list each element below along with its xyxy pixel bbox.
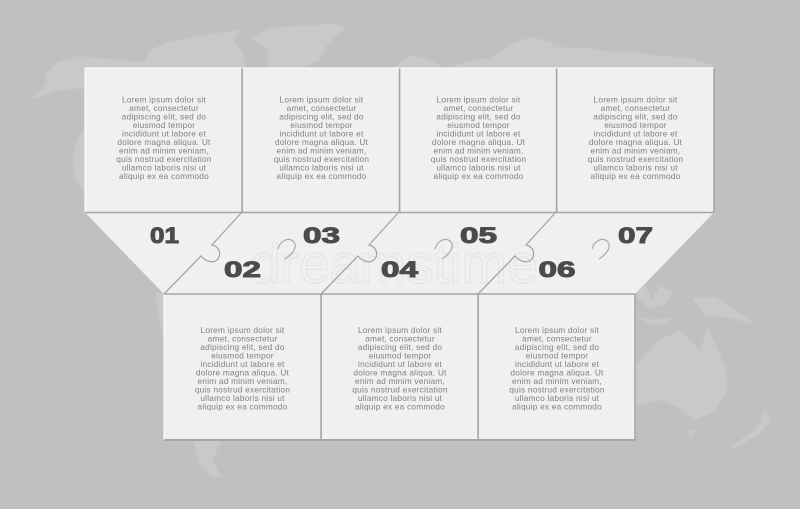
text block: step 06: enim ad minim veniam, bbox=[512, 376, 602, 386]
text block: step 01: adipiscing elit, sed do bbox=[122, 112, 206, 122]
panel: puzzle connector band bbox=[85, 212, 714, 294]
text block: step 01: incididunt ut labore et bbox=[122, 128, 206, 138]
text block: step 03 bbox=[274, 94, 369, 181]
text block: step 04: dolore magna aliqua. Ut bbox=[353, 368, 447, 378]
puzzle divider 03-04 bbox=[321, 212, 399, 294]
panel: step 02 bottom card bbox=[164, 294, 320, 440]
text block: step 01: dolore magna aliqua. Ut bbox=[117, 137, 211, 147]
text block: step 05: ullamco laboris nisi ut bbox=[436, 162, 521, 172]
number 03: 03 bbox=[303, 223, 340, 248]
number 05: 05 bbox=[460, 223, 497, 248]
text block: step 03: enim ad minim veniam, bbox=[277, 146, 366, 156]
text block: step 06 bbox=[509, 325, 605, 412]
text block: step 01: enim ad minim veniam, bbox=[119, 146, 209, 156]
text block: step 05: amet, consectetur bbox=[444, 103, 513, 113]
text block: step 07: quis nostrud exercitation bbox=[588, 154, 683, 164]
text block: step 05 bbox=[431, 94, 526, 181]
text block: step 03: eiusmod tempor bbox=[290, 120, 353, 130]
text block: step 05: enim ad minim veniam, bbox=[434, 146, 523, 156]
text block: step 05: eiusmod tempor bbox=[447, 120, 510, 130]
text block: step 01: quis nostrud exercitation bbox=[116, 154, 212, 164]
text block: step 04: enim ad minim veniam, bbox=[355, 376, 445, 386]
text block: step 07: incididunt ut labore et bbox=[594, 128, 678, 138]
text block: step 03: adipiscing elit, sed do bbox=[279, 112, 364, 122]
text block: step 06: eiusmod tempor bbox=[526, 350, 588, 360]
panel: step 05 top card bbox=[400, 68, 556, 212]
watermark: dreamstime bbox=[250, 232, 538, 295]
text block: step 01 bbox=[116, 94, 212, 181]
text block: step 04: amet, consectetur bbox=[365, 334, 435, 344]
card edges bbox=[85, 68, 714, 440]
text block: step 04: ullamco laboris nisi ut bbox=[358, 393, 443, 403]
text block: step 02: adipiscing elit, sed do bbox=[200, 342, 285, 352]
text block: step 03: quis nostrud exercitation bbox=[274, 154, 369, 164]
text block: step 01: amet, consectetur bbox=[129, 103, 199, 113]
text block: step 07: aliquip ex ea commodo bbox=[591, 171, 681, 181]
text block: step 05: dolore magna aliqua. Ut bbox=[432, 137, 526, 147]
text block: step 06: quis nostrud exercitation bbox=[509, 384, 605, 394]
text block: step 02: eiusmod tempor bbox=[211, 350, 274, 360]
text block: step 03: Lorem ipsum dolor sit bbox=[280, 94, 364, 104]
panel: step 01 top card bbox=[86, 68, 242, 212]
text block: step 02: amet, consectetur bbox=[208, 334, 277, 344]
text block: step 01: aliquip ex ea commodo bbox=[119, 171, 209, 181]
text block: step 03: incididunt ut labore et bbox=[280, 128, 364, 138]
panel: step 03 top card bbox=[243, 68, 399, 212]
text block: step 07: enim ad minim veniam, bbox=[591, 146, 680, 156]
text block: step 07: adipiscing elit, sed do bbox=[593, 112, 678, 122]
text block: step 07: amet, consectetur bbox=[601, 103, 670, 113]
text block: step 01: eiusmod tempor bbox=[133, 120, 195, 130]
text block: step 06: adipiscing elit, sed do bbox=[515, 342, 599, 352]
text block: step 07: ullamco laboris nisi ut bbox=[593, 162, 678, 172]
card highlights bbox=[85, 68, 714, 440]
number 06: 06 bbox=[538, 257, 576, 282]
text block: step 04: eiusmod tempor bbox=[369, 350, 431, 360]
text block: step 06: dolore magna aliqua. Ut bbox=[510, 368, 604, 378]
text block: step 03: amet, consectetur bbox=[287, 103, 356, 113]
text block: step 05: quis nostrud exercitation bbox=[431, 154, 526, 164]
text block: step 06: ullamco laboris nisi ut bbox=[515, 393, 600, 403]
text block: step 04: adipiscing elit, sed do bbox=[358, 342, 442, 352]
panel: step 04 bottom card bbox=[322, 294, 478, 440]
number 04: 04 bbox=[381, 257, 419, 282]
text block: step 01: Lorem ipsum dolor sit bbox=[122, 94, 206, 104]
text block: step 03: ullamco laboris nisi ut bbox=[279, 162, 364, 172]
puzzle knob 04-05 bbox=[435, 239, 452, 259]
text block: step 07: dolore magna aliqua. Ut bbox=[589, 137, 683, 147]
text block: step 02: enim ad minim veniam, bbox=[198, 376, 287, 386]
text block: step 07: Lorem ipsum dolor sit bbox=[594, 94, 678, 104]
number 07: 07 bbox=[618, 223, 653, 248]
text block: step 02: aliquip ex ea commodo bbox=[198, 402, 288, 412]
puzzle divider 01-02 bbox=[164, 212, 242, 294]
text block: step 02: quis nostrud exercitation bbox=[195, 384, 290, 394]
text block: step 04: aliquip ex ea commodo bbox=[355, 402, 445, 412]
text block: step 07: eiusmod tempor bbox=[604, 120, 667, 130]
panel: step 06 bottom card bbox=[479, 294, 634, 440]
number 01: 01 bbox=[150, 223, 179, 248]
text block: step 02: ullamco laboris nisi ut bbox=[200, 393, 285, 403]
text block: step 03: aliquip ex ea commodo bbox=[277, 171, 367, 181]
text block: step 05: adipiscing elit, sed do bbox=[436, 112, 521, 122]
puzzle knob 06-07 bbox=[592, 239, 609, 259]
text block: step 04 bbox=[352, 325, 448, 412]
text block: step 06: aliquip ex ea commodo bbox=[512, 402, 602, 412]
text block: step 06: Lorem ipsum dolor sit bbox=[515, 325, 599, 335]
text block: step 05: incididunt ut labore et bbox=[437, 128, 521, 138]
text block: step 04: Lorem ipsum dolor sit bbox=[358, 325, 442, 335]
text block: step 07 bbox=[588, 94, 683, 181]
text block: step 06: amet, consectetur bbox=[522, 334, 592, 344]
text block: step 06: incididunt ut labore et bbox=[515, 359, 599, 369]
text block: step 02: incididunt ut labore et bbox=[201, 359, 285, 369]
text block: step 03: dolore magna aliqua. Ut bbox=[275, 137, 369, 147]
panel: step 07 top card bbox=[558, 68, 714, 212]
text block: step 02 bbox=[195, 325, 290, 412]
puzzle knob 02-03 bbox=[278, 239, 295, 259]
text block: step 01: ullamco laboris nisi ut bbox=[122, 162, 207, 172]
text block: step 04: quis nostrud exercitation bbox=[352, 384, 448, 394]
text block: step 02: dolore magna aliqua. Ut bbox=[196, 368, 290, 378]
number 02: 02 bbox=[224, 257, 261, 282]
puzzle divider 05-06 bbox=[478, 212, 556, 294]
text block: step 04: incididunt ut labore et bbox=[358, 359, 442, 369]
text block: step 05: Lorem ipsum dolor sit bbox=[437, 94, 521, 104]
text block: step 02: Lorem ipsum dolor sit bbox=[201, 325, 285, 335]
text block: step 05: aliquip ex ea commodo bbox=[434, 171, 524, 181]
